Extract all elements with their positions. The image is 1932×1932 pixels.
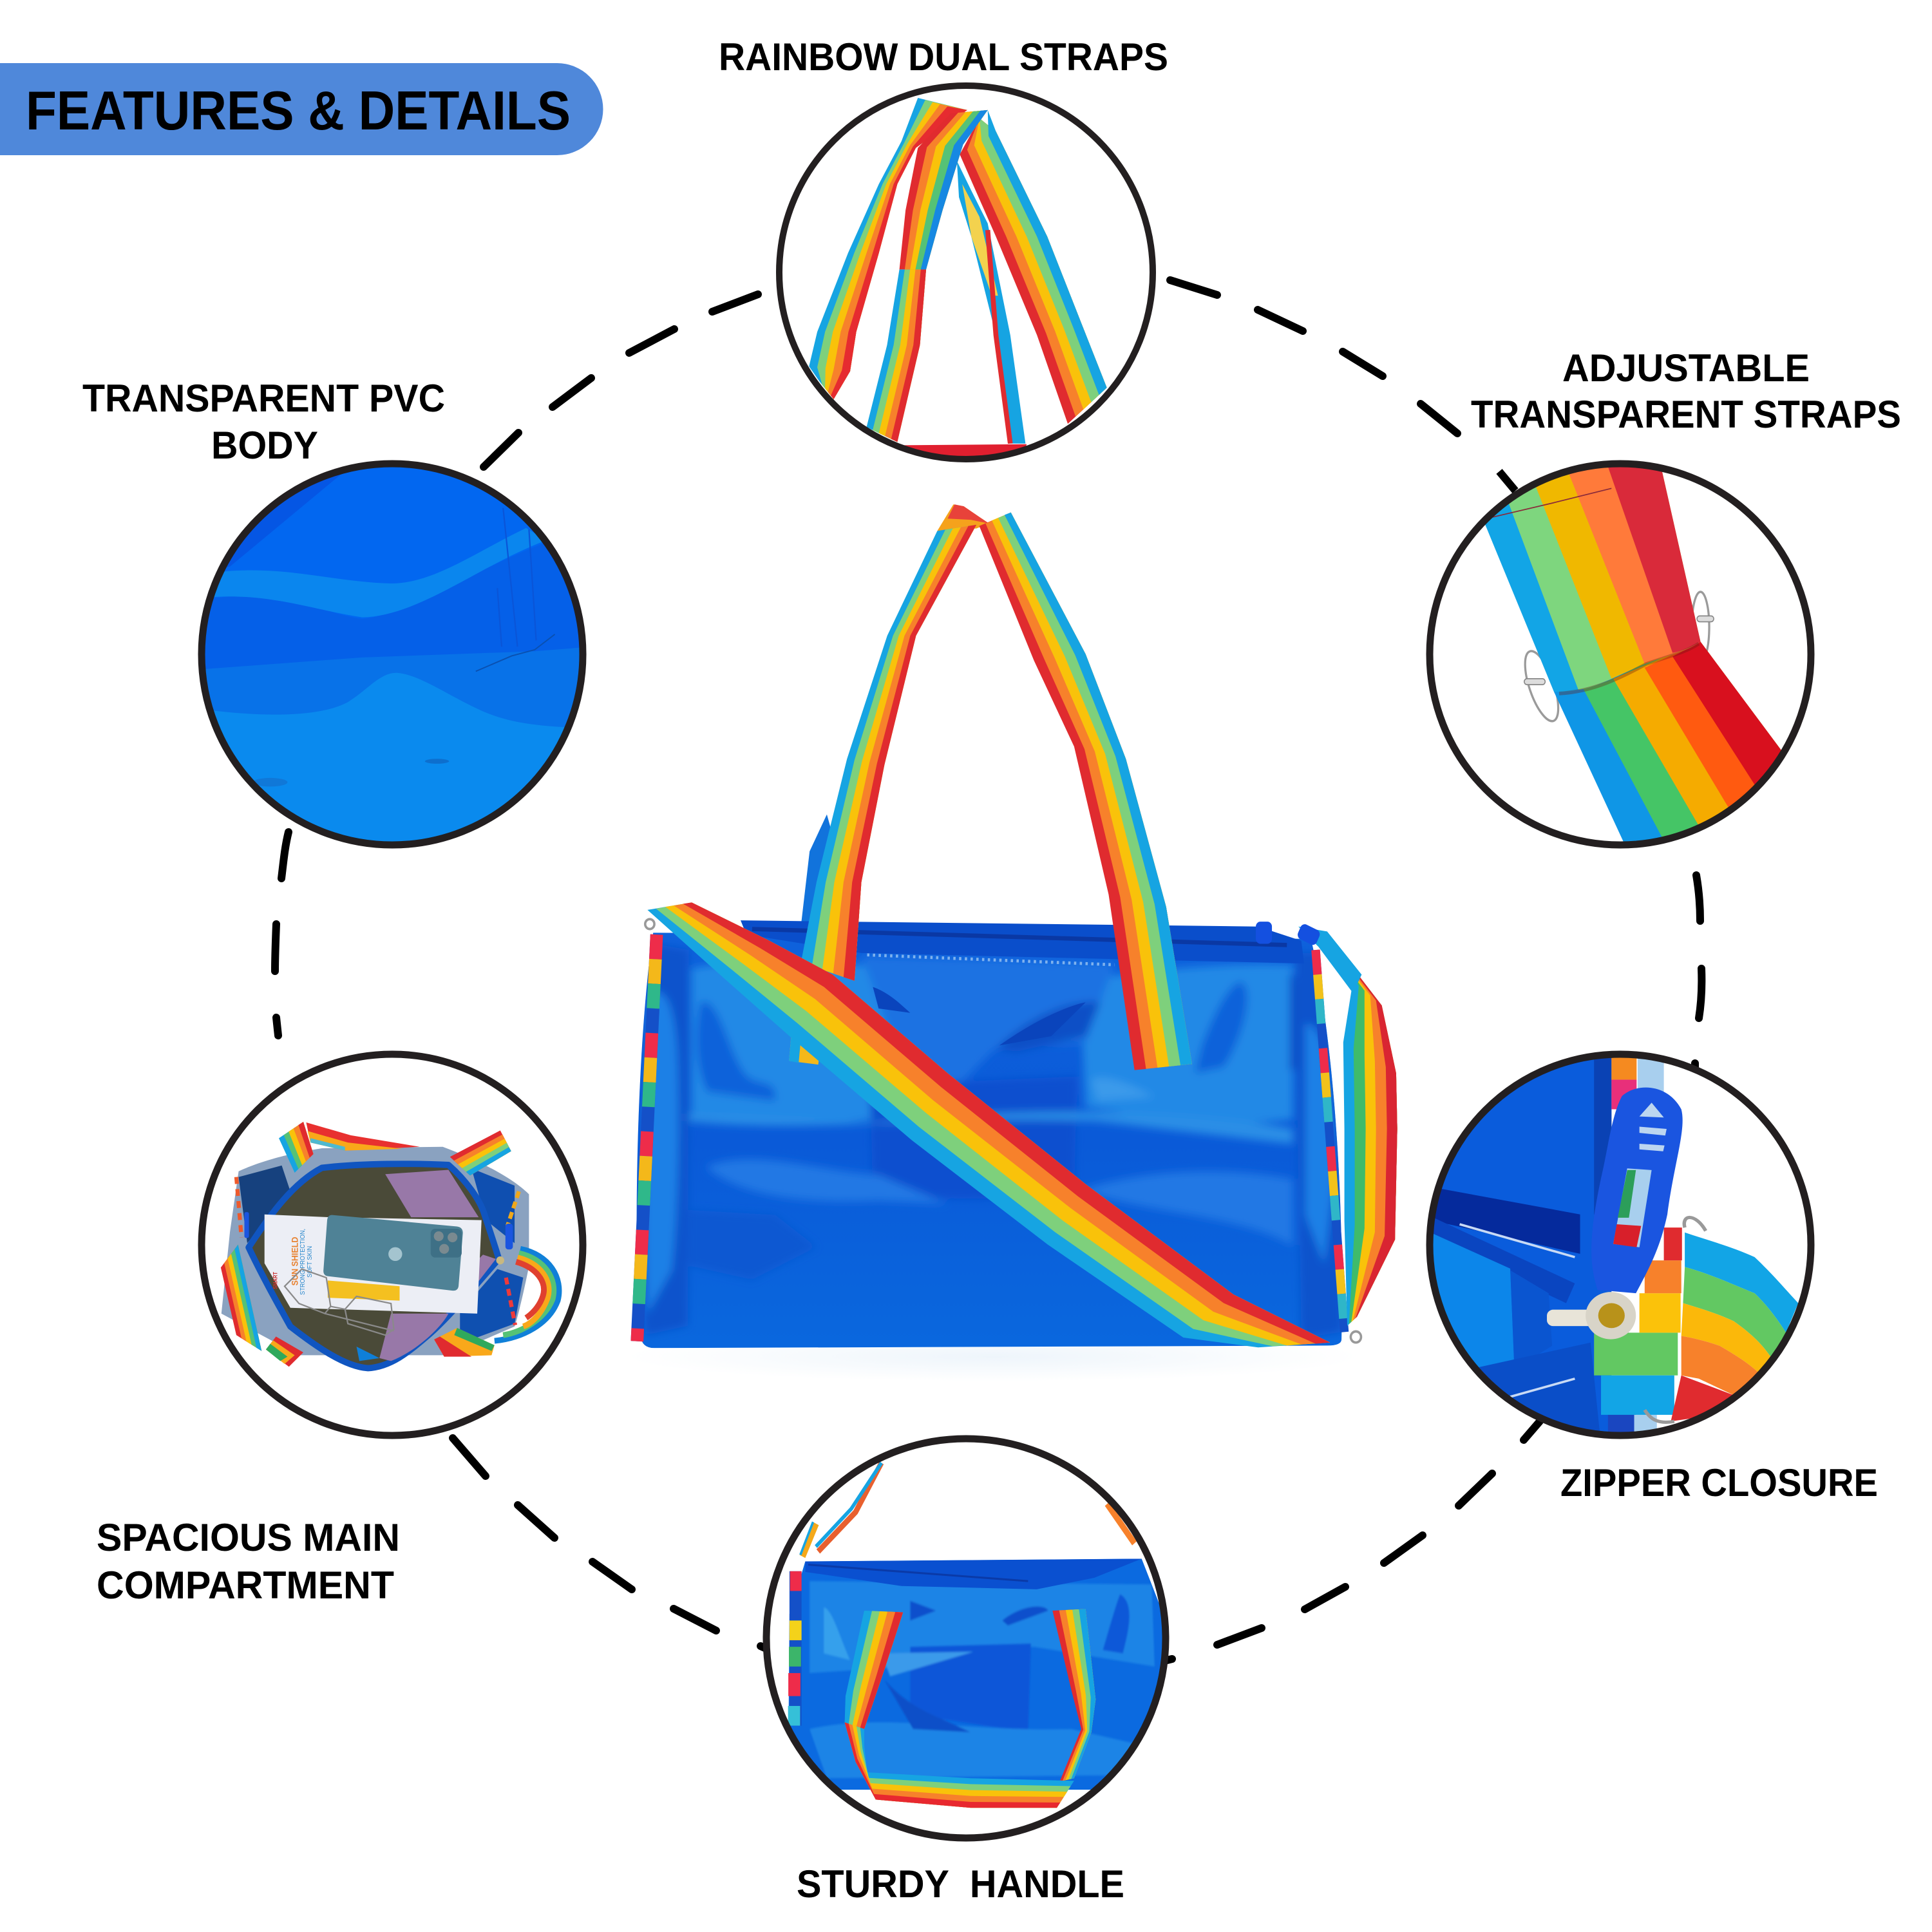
panel: adjustable straps xyxy=(1426,460,1815,849)
panel: rainbow dual straps xyxy=(779,86,1153,460)
mini left handle xyxy=(845,1611,903,1729)
bag with handle illustration xyxy=(786,1463,1166,1808)
bag body xyxy=(625,925,1356,1357)
zipper close-up xyxy=(1419,1050,1798,1444)
open bag illustration xyxy=(221,1122,559,1368)
material close-up xyxy=(206,475,580,841)
right handle xyxy=(980,513,1192,1070)
main product: transparent blue duffel bag xyxy=(625,504,1397,1381)
soft floor shadow xyxy=(625,1332,1361,1381)
right handle xyxy=(495,1249,559,1341)
panel: transparent PVC body xyxy=(196,455,592,866)
zipper band xyxy=(741,920,1304,965)
zipper pulls and metal rings xyxy=(645,919,1361,1343)
panel: sturdy handle xyxy=(766,1439,1166,1838)
mini bottom handle band xyxy=(845,1722,1074,1808)
label: rainbow dual straps: RAINBOW DUAL STRAPS xyxy=(719,35,1168,79)
back handle sliver xyxy=(801,815,835,929)
panel: spacious main compartment xyxy=(202,1054,583,1435)
label: sturdy handle: STURDY HANDLE xyxy=(797,1862,1124,1906)
side piping and zipper pull xyxy=(236,1177,519,1325)
label: zipper closure: ZIPPER CLOSURE xyxy=(1560,1461,1878,1504)
right side piping xyxy=(1316,950,1345,1332)
label: spacious main compartment xyxy=(97,1516,400,1607)
title banner xyxy=(0,63,603,155)
brochure text: SUN SHIELD xyxy=(290,1236,299,1285)
brochure text: SMART xyxy=(272,1272,278,1289)
diagonal shoulder strap xyxy=(647,902,1330,1347)
label: spacious main compartment: COMPARTMENT xyxy=(97,1564,394,1607)
label: transparent PVC body: TRANSPARENT PVC xyxy=(82,377,445,420)
top-right tab xyxy=(450,1130,511,1175)
label: spacious main compartment: SPACIOUS MAIN xyxy=(97,1516,400,1559)
side strap xyxy=(1298,927,1397,1326)
strap close-up xyxy=(1460,433,1817,891)
label: transparent PVC body xyxy=(82,377,445,467)
left strap xyxy=(221,1245,261,1351)
title banner: FEATURES & DETAILS xyxy=(26,80,571,142)
mini bag body xyxy=(786,1558,1166,1792)
label: adjustable transparent straps xyxy=(1471,346,1901,436)
strap detail illustration xyxy=(809,98,1107,460)
brochure text: SOFT SKIN xyxy=(307,1246,314,1278)
brochure text xyxy=(272,1229,314,1295)
label: adjustable transparent straps: TRANSPARENT STRAPS xyxy=(1471,393,1901,436)
left handle xyxy=(801,504,989,981)
bottom tabs xyxy=(266,1328,495,1367)
phone xyxy=(323,1215,463,1291)
mini right handle xyxy=(1052,1609,1095,1781)
left side piping xyxy=(637,934,657,1341)
dashed ring connecting the detail circles xyxy=(275,280,1701,1661)
glasses xyxy=(285,1269,394,1335)
top-left tab xyxy=(279,1122,314,1173)
panel: zipper closure xyxy=(1419,1050,1811,1444)
label: adjustable transparent straps: ADJUSTABLE xyxy=(1562,346,1810,390)
brochure text: STRONG PROTECTION, xyxy=(299,1229,307,1295)
label: transparent PVC body: BODY xyxy=(211,424,318,467)
left handle lower tab xyxy=(789,1036,821,1065)
